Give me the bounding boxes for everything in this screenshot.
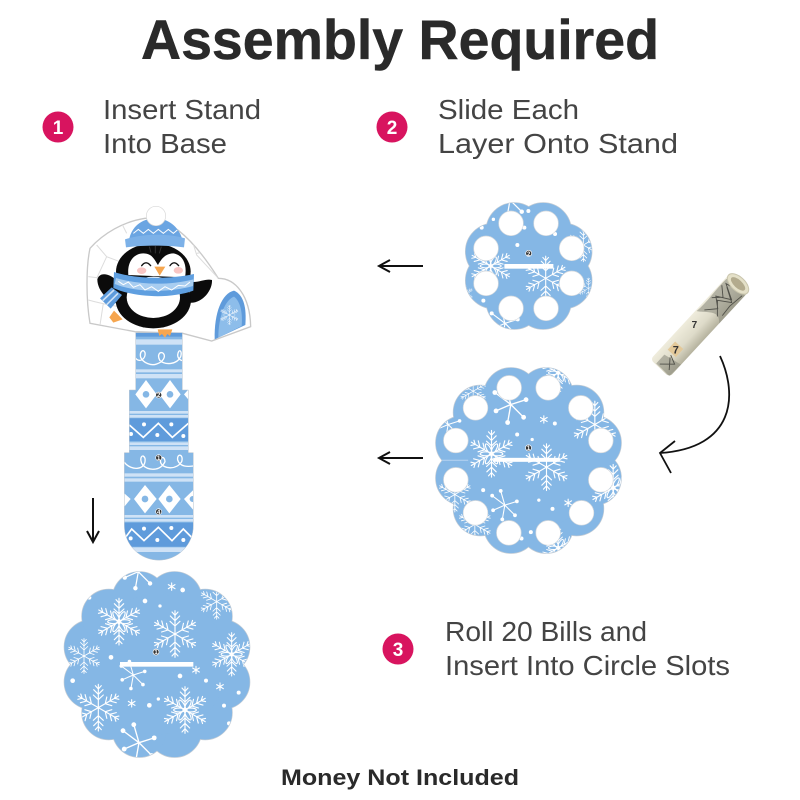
igloo bbox=[87, 218, 251, 341]
igloo door bbox=[215, 291, 246, 339]
pattern: zigzag bbox=[124, 423, 193, 541]
title: Assembly Required bbox=[141, 8, 659, 71]
rolled bill bbox=[650, 270, 752, 377]
step 1 text: Into Base bbox=[103, 128, 227, 159]
scarf bbox=[100, 272, 194, 309]
arrow: to small layer bbox=[379, 260, 423, 272]
bill roll opening bbox=[724, 270, 752, 298]
stand bbox=[123, 330, 198, 563]
step 3 text: Roll 20 Bills and bbox=[445, 616, 647, 647]
footer note: Money Not Included bbox=[281, 765, 519, 790]
step 2 badge: 2 bbox=[387, 118, 397, 139]
small layer: 2 bbox=[527, 252, 531, 258]
step 3 badge bbox=[382, 634, 414, 664]
step 2 text bbox=[438, 94, 678, 159]
rolled bill: 7 bbox=[692, 320, 698, 331]
pattern: loops bbox=[124, 351, 193, 469]
body bbox=[116, 243, 191, 328]
rolled bill: 7 bbox=[673, 345, 679, 357]
step 1 badge: 1 bbox=[53, 118, 64, 139]
bill engraving bbox=[652, 279, 745, 376]
flippers bbox=[97, 274, 212, 304]
pattern: diamonds bbox=[124, 380, 198, 513]
arrow: down to base bbox=[87, 498, 99, 542]
feet bbox=[109, 311, 172, 338]
hat bbox=[125, 206, 185, 247]
stand number markers: 1 bbox=[157, 456, 161, 462]
stand number markers: 4 bbox=[157, 510, 161, 516]
step 3 badge: 3 bbox=[393, 640, 403, 661]
stand number markers: 2 bbox=[157, 393, 161, 399]
step 1 text bbox=[103, 94, 261, 159]
holes bbox=[474, 211, 584, 321]
penguin bbox=[97, 206, 212, 338]
holes bbox=[444, 376, 613, 545]
step 1 text: Insert Stand bbox=[103, 94, 261, 125]
step 2 text: Layer Onto Stand bbox=[438, 128, 678, 159]
base layer: 1 bbox=[154, 650, 158, 656]
step 3 text bbox=[445, 616, 730, 681]
small layer bbox=[465, 202, 592, 330]
large layer: 1 bbox=[527, 446, 531, 452]
step 2 text: Slide Each bbox=[438, 94, 579, 125]
face bbox=[137, 263, 183, 276]
step 1 badge bbox=[42, 112, 74, 142]
large layer bbox=[435, 367, 622, 554]
step 2 badge bbox=[376, 112, 408, 142]
arrow: to large layer bbox=[379, 452, 423, 464]
base layer bbox=[64, 571, 250, 758]
step 3 text: Insert Into Circle Slots bbox=[445, 650, 730, 681]
stand number markers bbox=[156, 392, 162, 516]
arrow: curved bill to layer bbox=[660, 356, 729, 473]
